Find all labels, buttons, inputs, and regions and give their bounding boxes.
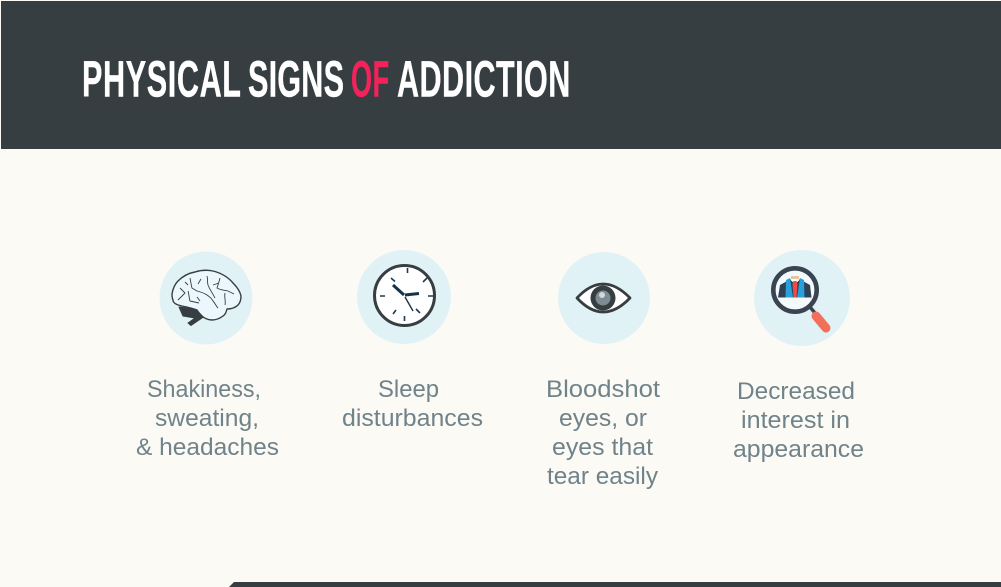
- label: sweating,: [155, 405, 259, 432]
- label: eyes, or: [559, 405, 647, 432]
- label: & headaches: [136, 434, 279, 461]
- item: shakiness: [136, 252, 279, 461]
- icon: brain: [160, 252, 252, 344]
- item: sleep: [342, 250, 483, 432]
- title: SIGNS: [248, 50, 344, 107]
- label: appearance: [733, 436, 864, 463]
- label: eyes that: [552, 434, 653, 461]
- label: [342, 376, 483, 432]
- title: [82, 50, 570, 108]
- label: Sleep: [378, 376, 439, 403]
- icon: magnifying glass with suit: [754, 250, 850, 346]
- label: interest in: [741, 407, 850, 434]
- icon: clock: [357, 250, 451, 344]
- bottom band: [229, 582, 1001, 587]
- label: [733, 378, 864, 463]
- icon: eye: [558, 252, 650, 344]
- label: Decreased: [737, 378, 855, 405]
- title: ADDICTION: [397, 50, 570, 107]
- item: bloodshot eyes: [546, 252, 660, 490]
- item: appearance: [733, 250, 864, 463]
- label: [546, 376, 660, 490]
- title: OF: [351, 50, 389, 108]
- label: Bloodshot: [546, 376, 660, 403]
- label: disturbances: [342, 405, 483, 432]
- label: Shakiness,: [147, 376, 261, 403]
- header band: [1, 1, 1001, 149]
- label: [136, 376, 279, 461]
- title: PHYSICAL: [82, 50, 241, 107]
- label: tear easily: [547, 463, 658, 490]
